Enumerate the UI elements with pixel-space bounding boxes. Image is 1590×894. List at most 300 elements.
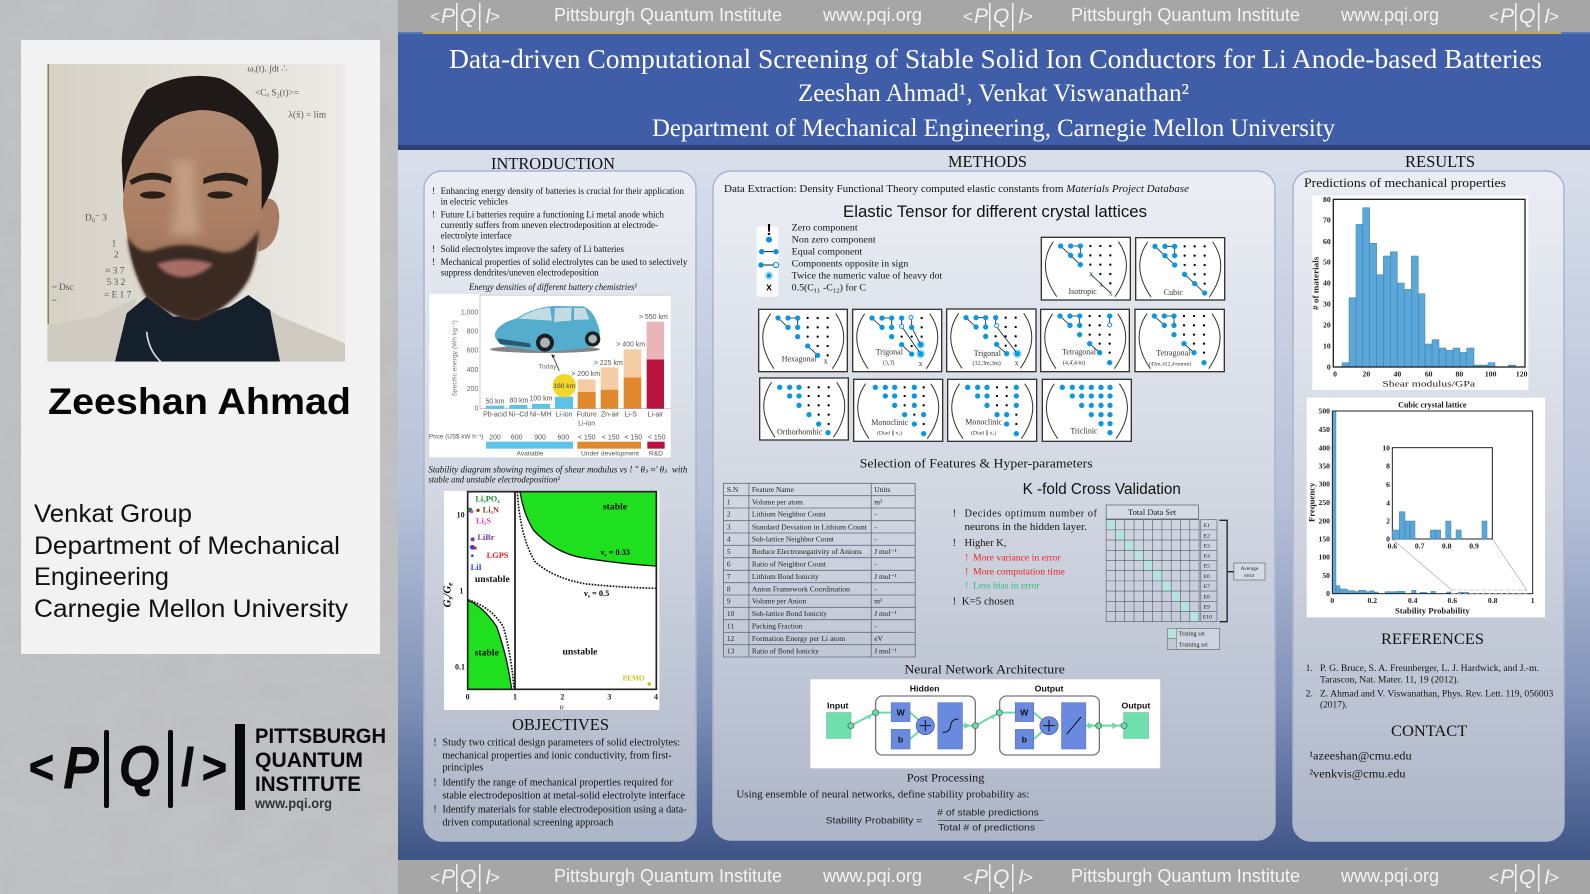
table: features: - xyxy=(874,621,877,630)
table: features: Volume per Anion xyxy=(752,597,807,606)
banner logo 1: > xyxy=(490,7,500,26)
diagram: neural network: Input xyxy=(827,700,849,710)
chart: stability probability histogram: 1 xyxy=(1531,596,1535,605)
banner logo 3 xyxy=(1489,3,1559,31)
banner logo 3: P xyxy=(1500,866,1514,889)
matrix: trigonal 32: Trigonal xyxy=(974,349,1002,358)
table: features: Ratio of Bond Ionicity xyxy=(752,646,819,655)
bars xyxy=(486,322,664,409)
heading: methods: METHODS xyxy=(948,152,1027,171)
logo: Pittsburgh Quantum Institute: INSTITUTE xyxy=(255,772,361,796)
diagram: neural network: b xyxy=(1022,734,1027,744)
chart: stability probability histogram: Cubic crystal lattice xyxy=(1398,401,1467,410)
k-fold bullets: Higher K, xyxy=(965,538,1006,549)
chart: shear modulus histogram: 80 xyxy=(1456,370,1463,379)
legend: testing and training set xyxy=(1167,628,1220,649)
reference list: (2017). xyxy=(1320,700,1347,711)
chart: battery energy densities: Available xyxy=(517,451,544,458)
caption: stability diagram: Stability diagram showing regimes of shear modulus vs ! " θₛ ≈' θₛ with xyxy=(428,465,688,475)
table: features: Units xyxy=(874,485,890,494)
k-fold bullets: ! xyxy=(953,538,956,549)
table: features: Reduce Electronegativity of Anions xyxy=(752,547,862,556)
table: features: - xyxy=(874,559,877,568)
contact emails: ²venkvis@cmu.edu xyxy=(1309,767,1406,780)
heading: post processing: Post Processing xyxy=(907,771,984,785)
table: features: Feature Name xyxy=(752,485,794,494)
chart: battery energy densities: 800 xyxy=(467,329,478,336)
banner logo 1: Q xyxy=(460,866,476,889)
banner text: Pittsburgh Quantum Institute xyxy=(554,5,782,25)
objectives bullets: ! xyxy=(433,805,437,816)
contact emails: ¹azeeshan@cmu.edu xyxy=(1309,749,1412,762)
diagram: k-fold data grid: E1 xyxy=(1203,523,1210,529)
matrix: isotropic xyxy=(1041,237,1130,300)
banner logo 2: P xyxy=(974,5,988,28)
chart: battery energy densities: Under development xyxy=(581,451,639,458)
chart: shear modulus histogram: # of materials xyxy=(1311,256,1320,310)
table: features: 4 xyxy=(727,535,731,544)
chart: battery energy densities: 80 km xyxy=(509,398,529,405)
table: features: 3 xyxy=(727,522,731,531)
banner text: Pittsburgh Quantum Institute xyxy=(1071,866,1300,886)
chart: battery energy densities: 600 xyxy=(511,434,523,441)
chart: battery energy densities: 900 xyxy=(534,434,546,441)
chart: stability diagram: G xyxy=(442,600,454,608)
chart: stability diagram: = 0.33 xyxy=(607,548,630,557)
chart: battery energy densities: Li-ion xyxy=(578,421,595,428)
logo: Pittsburgh Quantum Institute: Q xyxy=(120,737,159,797)
table: features: Sub-lattice Neighbor Count xyxy=(752,535,834,544)
chart: stability diagram: stable xyxy=(475,647,499,658)
logo: Pittsburgh Quantum Institute: P xyxy=(64,736,98,799)
chart: battery energy densities: Ni−MH xyxy=(530,412,551,419)
caption: energy densities: Energy densities of different battery chemistries¹ xyxy=(468,282,637,293)
k-fold bullets: ! xyxy=(953,596,956,607)
chart: battery energy densities: Ni−Cd xyxy=(509,412,528,419)
legend: tensor symbols: ! xyxy=(766,222,772,239)
table: features: 8 xyxy=(727,584,731,593)
banner logo 1: P xyxy=(441,5,455,28)
diagram: neural network: Hidden xyxy=(910,684,940,694)
banner logo 1 xyxy=(430,3,500,31)
logo: Pittsburgh Quantum Institute xyxy=(29,724,386,811)
table: features: m³ xyxy=(874,597,883,606)
chart: stability probability histogram: 0 xyxy=(1330,596,1334,605)
objectives bullets: ! xyxy=(433,738,437,749)
table: features: J mol⁻¹ xyxy=(874,572,897,581)
legend: testing and training set: Training set xyxy=(1179,642,1208,648)
inset chart: 10 xyxy=(1382,443,1390,452)
diagram: neural network: Output xyxy=(1035,684,1063,694)
legend: tensor symbols: 0.5(C xyxy=(792,283,813,294)
legend: tensor symbols: 11 xyxy=(814,287,820,294)
chart: battery energy densities: 160 km xyxy=(553,383,576,390)
banner logo 2: > xyxy=(1023,7,1033,26)
matrix: monoclinic x3: (Diad ∥ x₃) xyxy=(971,429,996,436)
chart: stability diagram: = 0.5 xyxy=(590,589,609,598)
chart: stability probability histogram: 500 xyxy=(1319,407,1330,416)
banner logo 1: < xyxy=(430,7,440,26)
heading: predictions: Predictions of mechanical properties xyxy=(1304,175,1506,190)
chart: battery energy densities: Li-air xyxy=(648,412,664,419)
legend: tensor symbols: Twice the numeric value of heavy dot xyxy=(792,271,943,282)
banner url: www.pqi.org xyxy=(1340,5,1439,25)
diagram: k-fold data grid: E9 xyxy=(1203,605,1210,611)
introduction bullets: currently suffers from uneven electrodeposition at electrode- xyxy=(441,220,658,231)
matrix: isotropic: x xyxy=(1109,289,1113,298)
chart: shear modulus histogram: 80 xyxy=(1323,195,1331,204)
banner logo 2: Q xyxy=(993,5,1009,28)
chart: stability diagram: e xyxy=(445,582,454,586)
logo: Pittsburgh Quantum Institute: < xyxy=(29,741,54,793)
diagram: k-fold data grid: error xyxy=(1244,573,1255,579)
chart: stability diagram: LiI xyxy=(471,563,482,572)
diagram: k-fold data grid xyxy=(1106,505,1265,622)
matrix: hexagonal: Hexagonal xyxy=(782,355,817,364)
affiliation text xyxy=(34,500,349,623)
chart: stability probability histogram: 150 xyxy=(1319,534,1330,543)
inset chart: 4 xyxy=(1386,498,1390,507)
table: features: 6 xyxy=(727,559,731,568)
banner logo 3: P xyxy=(1500,5,1514,28)
chart: stability probability histogram: 0.4 xyxy=(1408,596,1418,605)
matrix: monoclinic x3: Monoclinic xyxy=(965,417,1003,426)
k-fold bullets: neurons in the hidden layer. xyxy=(965,522,1087,533)
car illustration xyxy=(490,306,600,353)
formula: stability probability xyxy=(826,807,1044,832)
panel: methods xyxy=(713,171,1275,840)
banner logo 1: > xyxy=(490,868,500,887)
top banner strip xyxy=(398,0,1590,34)
chart: stability diagram: 1 xyxy=(513,693,517,702)
chart: battery energy densities: Pb-acid xyxy=(483,412,507,419)
chart: shear modulus histogram: 60 xyxy=(1323,237,1331,246)
logo: Pittsburgh Quantum Institute: I xyxy=(181,737,193,797)
table: features: - xyxy=(874,510,877,519)
banner logo 1 xyxy=(430,864,500,892)
poster title: Data-driven Computational Screening of Stable Solid Ion Conductors for Li Anode-based Batteries xyxy=(449,44,1542,74)
inset chart: 0.6 xyxy=(1388,541,1397,550)
matrix: cubic xyxy=(1136,238,1225,300)
table: features: Anion Framework Coordination xyxy=(752,584,850,593)
chart: battery energy densities: 600 xyxy=(558,434,569,441)
matrix: trigonal 3: x xyxy=(919,359,923,368)
chart: shear modulus histogram: 0 xyxy=(1327,362,1331,371)
table: features xyxy=(724,483,915,657)
department: Department of Mechanical Engineering, Carnegie Mellon University xyxy=(652,115,1335,142)
objectives bullets xyxy=(433,738,687,828)
legend: tensor symbols: Equal component xyxy=(792,246,863,257)
chart: shear modulus histogram: 30 xyxy=(1323,299,1331,308)
banner logo 3: > xyxy=(1549,7,1559,26)
legend: tensor symbols: Zero component xyxy=(792,223,858,234)
panel: presenter card xyxy=(21,40,380,654)
panel: results xyxy=(1293,171,1564,841)
chart: battery energy densities: 400 xyxy=(467,367,478,374)
poster background xyxy=(398,150,1590,861)
chart: stability probability histogram: Stability Probability xyxy=(1395,606,1471,615)
introduction bullets: ! xyxy=(432,244,435,255)
k-fold bullets: Less bias in error xyxy=(973,582,1040,592)
chart: battery energy densities: 0 xyxy=(474,406,478,413)
diagram: neural network: b xyxy=(898,734,903,744)
title banner xyxy=(398,34,1590,150)
table: features: - xyxy=(874,522,877,531)
chart: shear modulus histogram: 50 xyxy=(1323,258,1331,267)
reference list: 1. xyxy=(1306,663,1313,674)
chart: stability diagram: LiBr xyxy=(477,533,495,542)
chart: stability diagram: 1 xyxy=(459,587,463,596)
k-fold bullets: More variance in error xyxy=(973,554,1061,564)
legend: tensor symbols: ) for C xyxy=(840,283,866,294)
chart: battery energy densities: > 550 km xyxy=(639,314,668,321)
k-fold bullets: More computation time xyxy=(973,568,1065,578)
table: features: Ratio of Neighbor Count xyxy=(752,559,826,568)
table: features: - xyxy=(874,584,877,593)
objectives bullets: mechanical properties and ionic conductivity, from first- xyxy=(442,750,672,761)
photo: presenter portrait: ω,(t). ∫dt ∴ xyxy=(247,63,287,74)
legend: tensor symbols: 12 xyxy=(833,287,840,294)
reference list xyxy=(1306,663,1553,711)
matrix: trigonal 3: Trigonal xyxy=(876,348,904,357)
banner logo 3: < xyxy=(1489,868,1499,887)
photo: presenter portrait: ~ Dsc xyxy=(52,283,74,293)
diagram: k-fold data grid: E5 xyxy=(1203,564,1210,570)
inset chart xyxy=(1382,443,1492,550)
chart: stability probability histogram: 200 xyxy=(1319,516,1330,525)
k-fold bullets: ! xyxy=(953,509,956,520)
table: features: eV xyxy=(874,634,884,643)
table: features: S.N xyxy=(727,485,739,494)
photo: presenter portrait: 2 xyxy=(114,250,119,260)
matrix: trigonal 3: (3,3̄) xyxy=(883,359,894,366)
chart: stability diagram: s xyxy=(588,593,591,599)
formula: stability probability: # of stable predictions xyxy=(937,807,1039,818)
objectives bullets: principles xyxy=(442,763,483,774)
chart: battery energy densities: Price (US$ kW h⁻¹) xyxy=(429,435,483,441)
chart: shear modulus histogram: Shear modulus/GPa xyxy=(1382,380,1475,389)
banner logo 2: > xyxy=(1023,868,1033,887)
heading: elastic tensor: Elastic Tensor for different crystal lattices xyxy=(843,203,1147,221)
chart: shear modulus histogram xyxy=(1311,195,1528,390)
heading: k-fold cross validation: K -fold Cross Validation xyxy=(1023,481,1181,498)
table: features: 11 xyxy=(727,621,734,630)
chart: battery energy densities: < 150 xyxy=(648,434,666,441)
table: features: Volume per atom xyxy=(752,497,803,506)
logo: Pittsburgh Quantum Institute: PITTSBURGH xyxy=(255,724,386,748)
chart: battery energy densities: 200 xyxy=(489,434,501,441)
logo: Pittsburgh Quantum Institute: > xyxy=(202,741,227,793)
chart: battery energy densities: > 225 km xyxy=(594,360,623,367)
objectives bullets: ! xyxy=(433,778,437,789)
diagram: k-fold data grid: E6 xyxy=(1203,574,1210,580)
diagram: k-fold data grid: E10 xyxy=(1203,615,1212,621)
banner logo 1: I xyxy=(485,866,491,889)
chart: stability probability histogram: 400 xyxy=(1319,443,1330,452)
matrix: triclinic xyxy=(1042,379,1131,441)
chart: stability diagram: υ xyxy=(560,702,564,711)
chart: shear modulus histogram: 20 xyxy=(1363,370,1370,379)
k-fold bullets: ! xyxy=(965,568,968,578)
introduction bullets: in electric vehicles xyxy=(441,196,508,207)
introduction bullets: ! xyxy=(432,186,435,197)
matrix: triclinic: Triclinic xyxy=(1070,426,1098,435)
sidebar background xyxy=(0,0,398,894)
bottom banner strip xyxy=(398,860,1590,894)
contact emails xyxy=(1309,749,1412,780)
diagram: k-fold data grid: E7 xyxy=(1203,584,1210,590)
chart: stability diagram: 4 xyxy=(654,693,658,702)
matrix: orthorhombic: Orthorhombic xyxy=(777,428,823,437)
chart: battery energy densities: < 150 xyxy=(578,434,596,441)
chart: battery energy densities: Zn-air xyxy=(601,412,620,419)
table: features: 12 xyxy=(727,634,735,643)
introduction bullets: Future Li batteries require a functioning Li metal anode which xyxy=(441,210,664,221)
logo: Pittsburgh Quantum Institute: www.pqi.org xyxy=(254,796,332,811)
introduction bullets: electrolyte interface xyxy=(441,230,512,241)
chart: stability probability histogram: 100 xyxy=(1319,553,1330,562)
matrix: monoclinic x2 xyxy=(854,379,943,441)
caption: stability diagram: stable and unstable electrodeposition² xyxy=(428,474,560,484)
affiliation text: Carnegie Mellon University xyxy=(34,595,349,623)
banner logo 3: Q xyxy=(1519,866,1535,889)
chart: stability probability histogram: 250 xyxy=(1319,498,1330,507)
objectives bullets: driven computational screening approach xyxy=(442,817,613,828)
chart: shear modulus histogram: 40 xyxy=(1323,279,1331,288)
table: features: 9 xyxy=(727,597,731,606)
legend: testing and training set: Testing set xyxy=(1179,632,1205,638)
matrix: tetragonal 4: Tetragonal xyxy=(1062,348,1097,357)
photo: presenter portrait: ~ xyxy=(52,296,57,306)
chart: stability diagram: Li₃PO₄ xyxy=(475,495,500,504)
banner logo 2: < xyxy=(963,868,973,887)
chart: battery energy densities: 200 xyxy=(467,386,478,393)
chart: stability probability histogram: 300 xyxy=(1319,480,1330,489)
chart: stability diagram: ν xyxy=(601,548,604,557)
matrix: isotropic: x xyxy=(1089,270,1093,279)
banner logo 2: < xyxy=(963,7,973,26)
chart: stability probability histogram: 0 xyxy=(1326,589,1330,598)
banner logo 1: Q xyxy=(460,5,476,28)
chart: stability diagram xyxy=(442,491,659,711)
banner logo 3: > xyxy=(1549,868,1559,887)
authors: Zeeshan Ahmad¹, Venkat Viswanathan² xyxy=(798,80,1189,107)
chart: battery energy densities: Today xyxy=(539,364,557,371)
post processing text: Using ensemble of neural networks, define stability probability as: xyxy=(736,789,1030,800)
matrix: tetragonal 42m: Tetragonal xyxy=(1156,348,1191,357)
heading: introduction: INTRODUCTION xyxy=(491,154,615,173)
k-fold bullets: Decides optimum number of xyxy=(965,509,1098,520)
matrix: monoclinic x2: (Diad ∥ x₂) xyxy=(877,430,902,437)
heading: neural network architecture: Neural Network Architecture xyxy=(904,662,1065,676)
chart: shear modulus histogram: 40 xyxy=(1394,370,1401,379)
inset chart: 2 xyxy=(1386,517,1390,526)
table: features: 5 xyxy=(727,547,731,556)
formula: stability probability: Stability Probability = xyxy=(826,814,923,825)
table: features: 2 xyxy=(727,510,731,519)
table: features: - xyxy=(874,535,877,544)
banner logo 1: < xyxy=(430,868,440,887)
inset chart: 0.8 xyxy=(1442,541,1452,550)
heading: objectives: OBJECTIVES xyxy=(512,715,609,734)
chart: battery energy densities: Li-S xyxy=(624,412,637,419)
banner logo 2 xyxy=(963,864,1033,892)
chart: stability diagram: stable xyxy=(603,501,628,512)
chart: stability probability histogram: 50 xyxy=(1322,571,1330,580)
inset chart: 0 xyxy=(1386,535,1390,544)
chart: stability diagram: s xyxy=(604,552,607,558)
matrix: tetragonal 42m xyxy=(1135,309,1224,372)
k-fold bullets xyxy=(953,509,1098,607)
matrix: trigonal 3 xyxy=(853,309,942,372)
inset chart: 6 xyxy=(1386,480,1390,489)
chart: stability diagram: PEMO xyxy=(623,674,645,683)
matrix: isotropic: Isotropic xyxy=(1068,287,1097,296)
diagram: k-fold data grid: E3 xyxy=(1203,543,1210,549)
introduction bullets: ! xyxy=(432,210,435,221)
formula: stability probability: Total # of predictions xyxy=(938,821,1035,832)
diagram: k-fold data grid: E4 xyxy=(1203,554,1210,560)
chart: stability diagram: 2 xyxy=(560,693,564,702)
matrix: trigonal 32: x xyxy=(1015,359,1019,368)
banner logo 2: I xyxy=(1018,866,1024,889)
panel: introduction and objectives xyxy=(424,171,696,841)
table: features: Packing Fraction xyxy=(752,621,803,630)
legend: tensor symbols: Components opposite in sign xyxy=(792,259,908,270)
introduction bullets: suppress dendrites/uneven electrodeposition xyxy=(441,267,599,278)
legend: tensor symbols: Non zero component xyxy=(792,234,876,245)
chart: battery energy densities: Future xyxy=(577,412,597,419)
introduction bullets: ! xyxy=(432,257,435,268)
banner logo 2 xyxy=(963,3,1033,31)
photo: presenter portrait: = E 1 7 xyxy=(104,290,132,300)
legend: tensor symbols xyxy=(757,222,943,297)
table: features: Lithium Bond Ionicity xyxy=(752,572,819,581)
banner logo 2: I xyxy=(1018,5,1024,28)
photo: presenter portrait xyxy=(47,63,345,362)
table: features: 10 xyxy=(727,609,735,618)
table: features: 7 xyxy=(727,572,731,581)
matrix: orthorhombic xyxy=(760,378,848,440)
chart: stability diagram: ν xyxy=(584,589,588,598)
chart: battery energy densities xyxy=(429,294,671,458)
chart: battery energy densities: Specific energy (Wh kg⁻¹) xyxy=(452,320,459,397)
banner url: www.pqi.org xyxy=(822,5,922,25)
affiliation text: Engineering xyxy=(34,563,169,591)
reference list: Tarascon, Nat. Mater. 11, 19 (2012). xyxy=(1320,675,1459,686)
table: features: J mol⁻¹ xyxy=(874,609,897,618)
matrix: trigonal 32 xyxy=(947,309,1036,372)
diagram: neural network: W xyxy=(896,708,906,718)
chart: stability probability histogram: 0.2 xyxy=(1368,596,1377,605)
k-fold bullets: ! xyxy=(965,582,968,592)
caption: stability diagram xyxy=(428,465,688,484)
table: features: Lithium Neighbor Count xyxy=(752,510,826,519)
table: features: Sub-lattice Bond Ionicity xyxy=(752,609,827,618)
matrix: tetragonal 42m: (4̄2m,422,4/mmm) xyxy=(1149,360,1191,367)
affiliation text: Venkat Group xyxy=(34,500,192,528)
chart: battery energy densities: < 150 xyxy=(602,434,620,441)
chart: stability diagram: /G xyxy=(442,586,454,598)
matrix: isotropic: x xyxy=(1099,279,1103,288)
chart: stability diagram: 0 xyxy=(466,693,470,702)
chart: battery energy densities: 1,000 xyxy=(461,310,478,317)
banner logo 3: Q xyxy=(1519,5,1535,28)
chart: stability diagram: 3 xyxy=(607,693,611,702)
tensor matrices xyxy=(759,237,1225,441)
chart: stability probability histogram: 0.6 xyxy=(1448,596,1457,605)
chart: stability probability histogram: Frequency xyxy=(1306,482,1316,522)
